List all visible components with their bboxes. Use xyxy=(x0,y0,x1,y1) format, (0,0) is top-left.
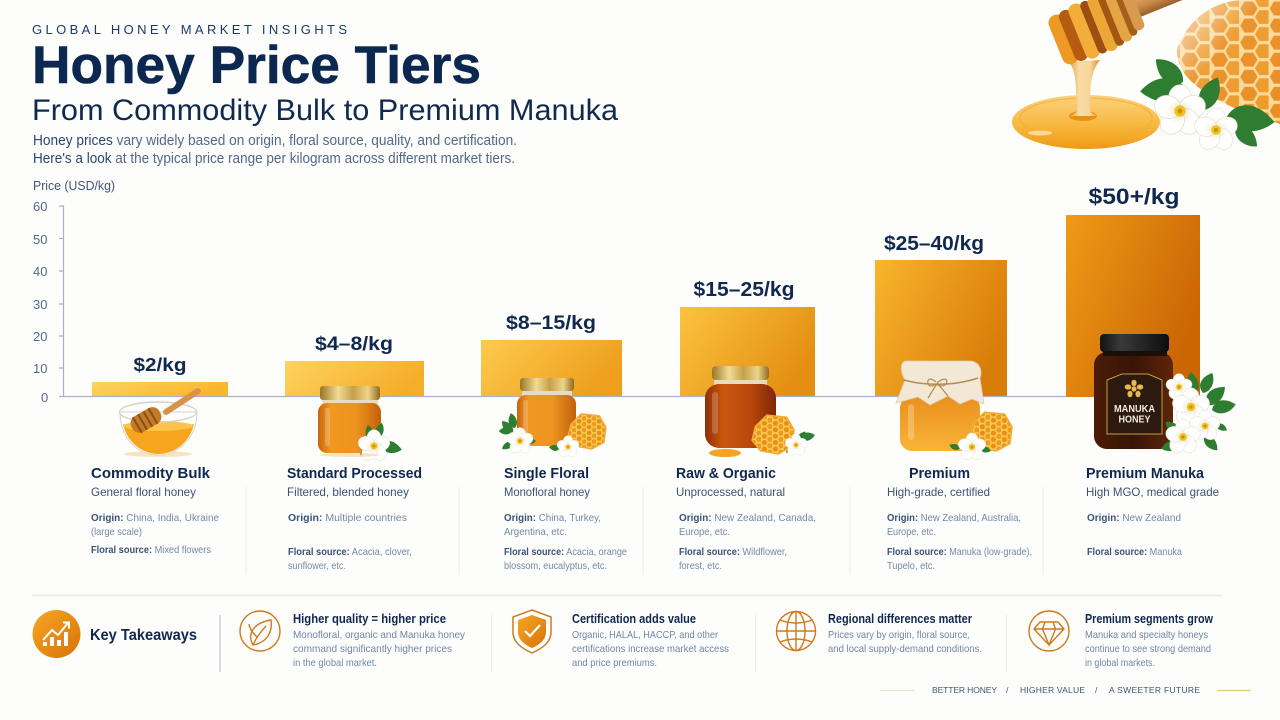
takeaway: certification xyxy=(513,610,729,669)
tier: Premium Manuka: Origin: New Zealand xyxy=(1087,512,1181,524)
tier: Premium: Origin: New Zealand, Australia, xyxy=(887,512,1021,524)
takeaway: premium segments: in global markets. xyxy=(1085,657,1155,669)
blossoms and leaves xyxy=(1160,370,1237,456)
tier: Standard Processed: Standard Processed xyxy=(287,465,422,482)
column dividers xyxy=(246,487,1043,575)
bar chart xyxy=(33,179,1200,405)
price labels: $4–8/kg xyxy=(315,334,393,355)
hero image: honey dipper, pool, honeycomb and blossoms xyxy=(1012,0,1280,153)
tier: Standard Processed xyxy=(287,465,422,572)
y axis labels: 60 xyxy=(33,199,47,214)
honeycomb xyxy=(1177,0,1280,124)
tier: Commodity Bulk: (large scale) xyxy=(91,526,142,538)
takeaway: premium segments xyxy=(1029,611,1213,669)
tier: Commodity Bulk: Commodity Bulk xyxy=(91,465,211,482)
key takeaways heading: Key Takeaways xyxy=(90,627,197,644)
tier: Raw and Organic xyxy=(676,465,816,572)
intro text xyxy=(33,133,517,167)
tier: Standard Processed: Filtered, blended honey xyxy=(287,485,409,499)
tier: Premium: High-grade, certified xyxy=(887,485,990,499)
takeaway: certification: certifications increase market access xyxy=(572,643,729,655)
takeaway: higher quality xyxy=(240,611,466,669)
title: Honey Price Tiers xyxy=(32,36,481,95)
honey dipper xyxy=(1045,0,1229,69)
tier: Standard Processed: Floral source: Acacia, clover, xyxy=(288,546,412,558)
takeaway: certification: and price premiums. xyxy=(572,657,657,669)
tier: Raw and Organic: Origin: New Zealand, Canada, xyxy=(679,512,816,524)
takeaway: regional differences xyxy=(776,612,982,655)
footer tagline xyxy=(880,685,1251,695)
takeaway: regional differences: Regional differences matter xyxy=(828,612,972,626)
honey stream xyxy=(1068,60,1100,116)
gold emblem xyxy=(1125,380,1143,397)
bar: Commodity Bulk xyxy=(92,382,228,397)
icon: leaf xyxy=(240,611,280,651)
tier: Premium Manuka: Premium Manuka xyxy=(1086,465,1205,482)
takeaway: higher quality: command significantly higher prices xyxy=(293,643,452,655)
tier: Premium Manuka: Floral source: Manuka xyxy=(1087,546,1182,558)
bar: Standard Processed xyxy=(285,361,424,397)
bar: Premium xyxy=(875,260,1007,397)
axis title: Price (USD/kg) xyxy=(33,179,115,193)
tier: Single Floral: Argentina, etc. xyxy=(504,526,567,538)
icon: growth chart xyxy=(32,610,80,658)
leaves xyxy=(1140,52,1277,152)
takeaway: regional differences: Prices vary by origin, floral source, xyxy=(828,629,970,641)
price labels: $2/kg xyxy=(134,354,186,375)
jar label text: MANUKA xyxy=(1114,404,1155,415)
tier: Single Floral: Origin: China, Turkey, xyxy=(504,512,601,524)
y axis labels: 0 xyxy=(41,390,48,405)
tier: Raw and Organic: Unprocessed, natural xyxy=(676,485,785,499)
tier: Raw and Organic: Raw & Organic xyxy=(676,465,776,482)
takeaway: certification: Certification adds value xyxy=(572,612,696,626)
footer tagline: / xyxy=(1006,685,1009,695)
price labels: $50+/kg xyxy=(1088,184,1180,209)
tier: Standard Processed: Origin: Multiple countries xyxy=(288,512,407,524)
honey pool xyxy=(1012,95,1160,149)
intro text: Here's a look at the typical price range per kilogram across different market tiers. xyxy=(33,151,515,167)
icon: globe xyxy=(776,612,816,650)
tier: Raw and Organic: forest, etc. xyxy=(679,560,722,572)
y axis labels: 30 xyxy=(33,297,47,312)
tier: Single Floral: blossom, eucalyptus, etc. xyxy=(504,560,607,572)
tier: Standard Processed: sunflower, etc. xyxy=(288,560,346,572)
illustration: glass bowl of honey with dipper xyxy=(120,391,198,457)
price labels xyxy=(134,184,1180,375)
tier: Premium: Tupelo, etc. xyxy=(887,560,935,572)
intro text: Honey prices vary widely based on origin, floral source, quality, and certification. xyxy=(33,133,517,149)
tier: Premium: Premium xyxy=(909,465,970,482)
footer tagline: / xyxy=(1095,685,1098,695)
illustration: Manuka honey jar with blossoms xyxy=(1094,334,1237,456)
footer tagline: A SWEETER FUTURE xyxy=(1109,685,1200,695)
footer tagline: BETTER HONEY xyxy=(932,685,997,695)
tier: Raw and Organic: Floral source: Wildflower, xyxy=(679,546,787,558)
tier: Commodity Bulk: Floral source: Mixed flowers xyxy=(91,544,211,556)
tier: Premium: Europe, etc. xyxy=(887,526,936,538)
takeaway: regional differences: and local supply-demand conditions. xyxy=(828,643,982,655)
blossoms xyxy=(1151,85,1240,153)
tier: Single Floral: Monofloral honey xyxy=(504,485,590,499)
tier: Commodity Bulk: Origin: China, India, Ukraine xyxy=(91,512,219,524)
takeaway: higher quality: Monofloral, organic and Manuka honey xyxy=(293,629,466,641)
tier: Raw and Organic: Europe, etc. xyxy=(679,526,730,538)
takeaway: premium segments: continue to see strong demand xyxy=(1085,643,1211,655)
takeaway: premium segments: Premium segments grow xyxy=(1085,612,1213,626)
illustration: premium jar with cloth cover xyxy=(896,361,1012,462)
tier: Premium Manuka xyxy=(1086,465,1219,558)
tier: Premium xyxy=(887,465,1032,572)
y axis labels: 10 xyxy=(33,361,47,376)
bar: Premium Manuka xyxy=(1066,215,1200,397)
y axis labels xyxy=(33,199,48,405)
takeaway: higher quality: Higher quality = higher price xyxy=(293,612,446,626)
tier: Premium: Floral source: Manuka (low-grade), xyxy=(887,546,1032,558)
tier: Single Floral xyxy=(504,465,627,572)
price labels: $25–40/kg xyxy=(884,233,984,255)
bar: Raw and Organic xyxy=(680,307,815,397)
illustration: Manuka honey jar with blossoms: HONEY xyxy=(1118,414,1151,426)
tier: Single Floral: Floral source: Acacia, orange xyxy=(504,546,627,558)
y axis labels: 20 xyxy=(33,329,47,344)
subtitle: From Commodity Bulk to Premium Manuka xyxy=(32,94,618,127)
price labels: $15–25/kg xyxy=(694,279,794,301)
takeaway: higher quality: in the global market. xyxy=(293,657,377,669)
icon: diamond xyxy=(1029,611,1069,651)
tier: Commodity Bulk xyxy=(91,465,219,556)
takeaway: premium segments: Manuka and specialty honeys xyxy=(1085,629,1208,641)
icon: shield xyxy=(513,610,551,653)
key takeaways heading xyxy=(32,610,197,658)
tier: Single Floral: Single Floral xyxy=(504,465,589,482)
price labels: $8–15/kg xyxy=(506,312,596,334)
eyebrow: GLOBAL HONEY MARKET INSIGHTS xyxy=(32,22,350,37)
illustration: single floral jar with honeycomb xyxy=(499,378,606,459)
y axis labels: 50 xyxy=(33,232,47,247)
illustration: raw and organic jar with honeycomb xyxy=(705,366,816,457)
footer tagline: HIGHER VALUE xyxy=(1020,685,1085,695)
y axis labels: 40 xyxy=(33,264,47,279)
takeaway: certification: Organic, HALAL, HACCP, and other xyxy=(572,629,718,641)
illustration: standard honey jar with blossom xyxy=(318,386,403,463)
tier: Premium Manuka: High MGO, medical grade xyxy=(1086,485,1219,499)
tier: Commodity Bulk: General floral honey xyxy=(91,485,196,499)
bar: Single Floral xyxy=(481,340,622,397)
